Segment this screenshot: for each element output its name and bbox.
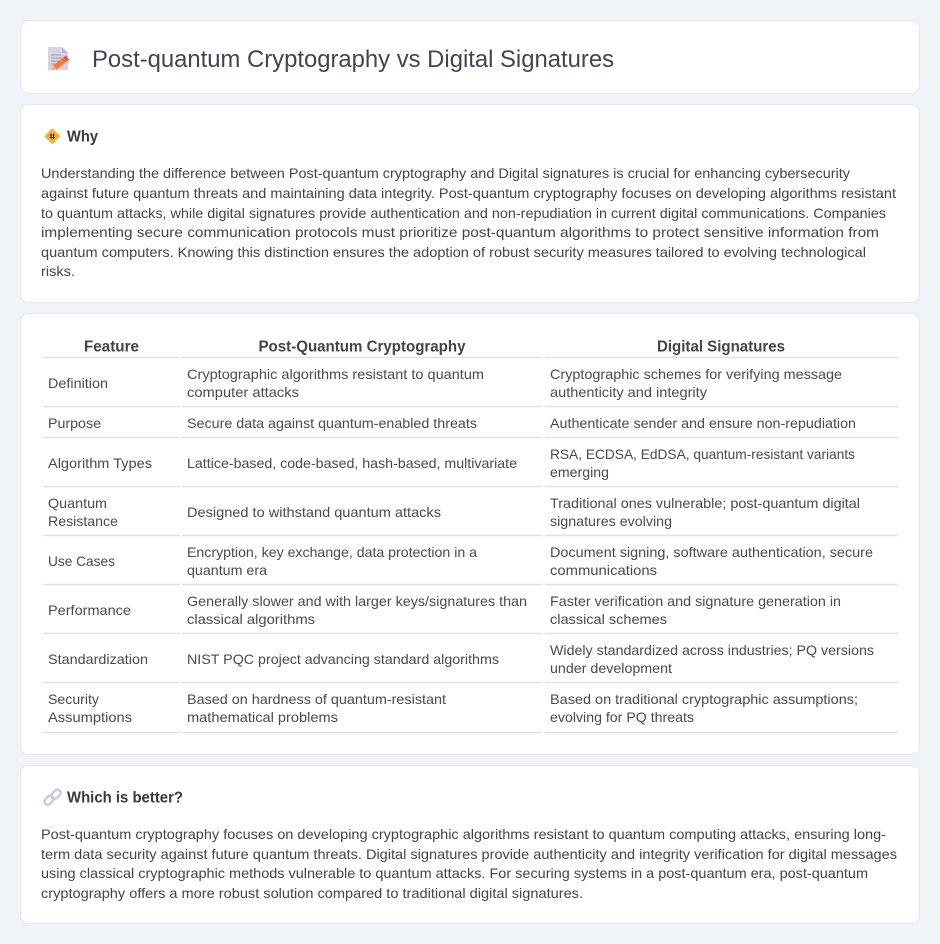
row: definition: computer attacks [187, 384, 299, 400]
row: definition: Cryptographic algorithms resistant to quantum [187, 366, 484, 382]
row: security assumptions: evolving for PQ threats [550, 709, 694, 725]
row: algorithm types: Algorithm Types [48, 455, 152, 471]
row: performance: Faster verification and signature generation in [550, 593, 841, 609]
row: algorithm types: RSA, ECDSA, EdDSA, quantum-resistant variants [550, 446, 855, 462]
why text block [41, 165, 896, 279]
row: standardization: Standardization [48, 651, 148, 667]
row: definition: Definition [48, 375, 108, 391]
why text block: Understanding the difference between Post-quantum cryptography and Digital signatures is crucial for enhancing cybersecurity [41, 165, 850, 181]
why text block: quantum computers. Knowing this distinction ensures the adoption of robust security measures tailored to evolving technological [41, 244, 866, 260]
row: performance: classical algorithms [187, 611, 315, 627]
row: quantum resistance: Designed to withstand quantum attacks [187, 504, 441, 520]
row: security assumptions: Based on hardness of quantum-resistant [187, 691, 446, 707]
conclusion text block: term data security against future quantum threats. Digital signatures provide authenticity and integrity verification for digital messages [41, 846, 897, 862]
why text block: risks. [41, 263, 75, 279]
row: quantum resistance [48, 495, 860, 529]
row: standardization: NIST PQC project advancing standard algorithms [187, 651, 499, 667]
table header: Digital Signatures [657, 338, 785, 356]
conclusion text block [41, 826, 897, 901]
row: performance: Generally slower and with larger keys/signatures than [187, 593, 527, 609]
why text block: to quantum attacks, while digital signatures provide authentication and non-repudiation in current digital communications. Companies [41, 205, 886, 221]
title heading: Post-quantum Cryptography vs Digital Signatures [92, 46, 614, 73]
row: algorithm types: emerging [550, 464, 609, 480]
conclusion text block: using classical cryptographic methods vulnerable to quantum attacks. For securing systems in a post-quantum era, post-quantum [41, 865, 868, 881]
table header: Feature [84, 338, 139, 356]
row: use cases: quantum era [187, 562, 267, 578]
row: quantum resistance: Resistance [48, 513, 118, 529]
row: purpose: Authenticate sender and ensure non-repudiation [550, 415, 856, 431]
row: performance: Performance [48, 602, 131, 618]
row: use cases: Document signing, software authentication, secure [550, 544, 873, 560]
row: quantum resistance: Traditional ones vulnerable; post-quantum digital [550, 495, 860, 511]
row: purpose: Secure data against quantum-enabled threats [187, 415, 477, 431]
table header [84, 338, 785, 356]
row: security assumptions: Based on traditional cryptographic assumptions; [550, 691, 858, 707]
row: algorithm types [48, 446, 855, 480]
row: performance: classical schemes [550, 611, 667, 627]
row: quantum resistance: Quantum [48, 495, 107, 511]
which is better heading: Which is better? [67, 790, 183, 806]
row: standardization: under development [550, 660, 672, 676]
row: standardization [48, 642, 874, 676]
icon: document with pencil [48, 47, 68, 70]
row: security assumptions [48, 691, 858, 725]
row: definition: Cryptographic schemes for verifying message [550, 366, 842, 382]
row: use cases [48, 544, 873, 578]
row: definition: authenticity and integrity [550, 384, 707, 400]
row: purpose: Purpose [48, 415, 101, 431]
panel: why [20, 104, 920, 302]
row: use cases: Use Cases [48, 553, 115, 569]
panel: title [20, 20, 920, 94]
panel: which is better [20, 766, 920, 924]
row: use cases: communications [550, 562, 657, 578]
row: use cases: Encryption, key exchange, data protection in a [187, 544, 477, 560]
row: performance [48, 593, 841, 627]
row: definition [48, 366, 842, 400]
why text block: implementing secure communication protocols must prioritize post-quantum algorithms to protect sensitive information from [41, 224, 879, 240]
row: algorithm types: Lattice-based, code-based, hash-based, multivariate [187, 455, 517, 471]
row: standardization: Widely standardized across industries; PQ versions [550, 642, 874, 658]
row: security assumptions: mathematical problems [187, 709, 338, 725]
why heading: Why [67, 128, 98, 146]
conclusion text block: cryptography offers a more robust solution compared to traditional digital signatures. [41, 885, 583, 901]
panel: comparison table [20, 314, 920, 754]
why text block: against future quantum threats and maintaining data integrity. Post-quantum cryptography focuses on developing algorithms resistant [41, 185, 896, 201]
icon: warning diamond [44, 128, 60, 144]
conclusion text block: Post-quantum cryptography focuses on developing cryptographic algorithms resistant to quantum computing attacks, ensuring long- [41, 826, 886, 842]
row: security assumptions: Security [48, 691, 99, 707]
row: security assumptions: Assumptions [48, 709, 132, 725]
icon: link [43, 788, 62, 806]
table header: Post-Quantum Cryptography [258, 338, 466, 356]
row: purpose [48, 415, 856, 431]
row: quantum resistance: signatures evolving [550, 513, 672, 529]
